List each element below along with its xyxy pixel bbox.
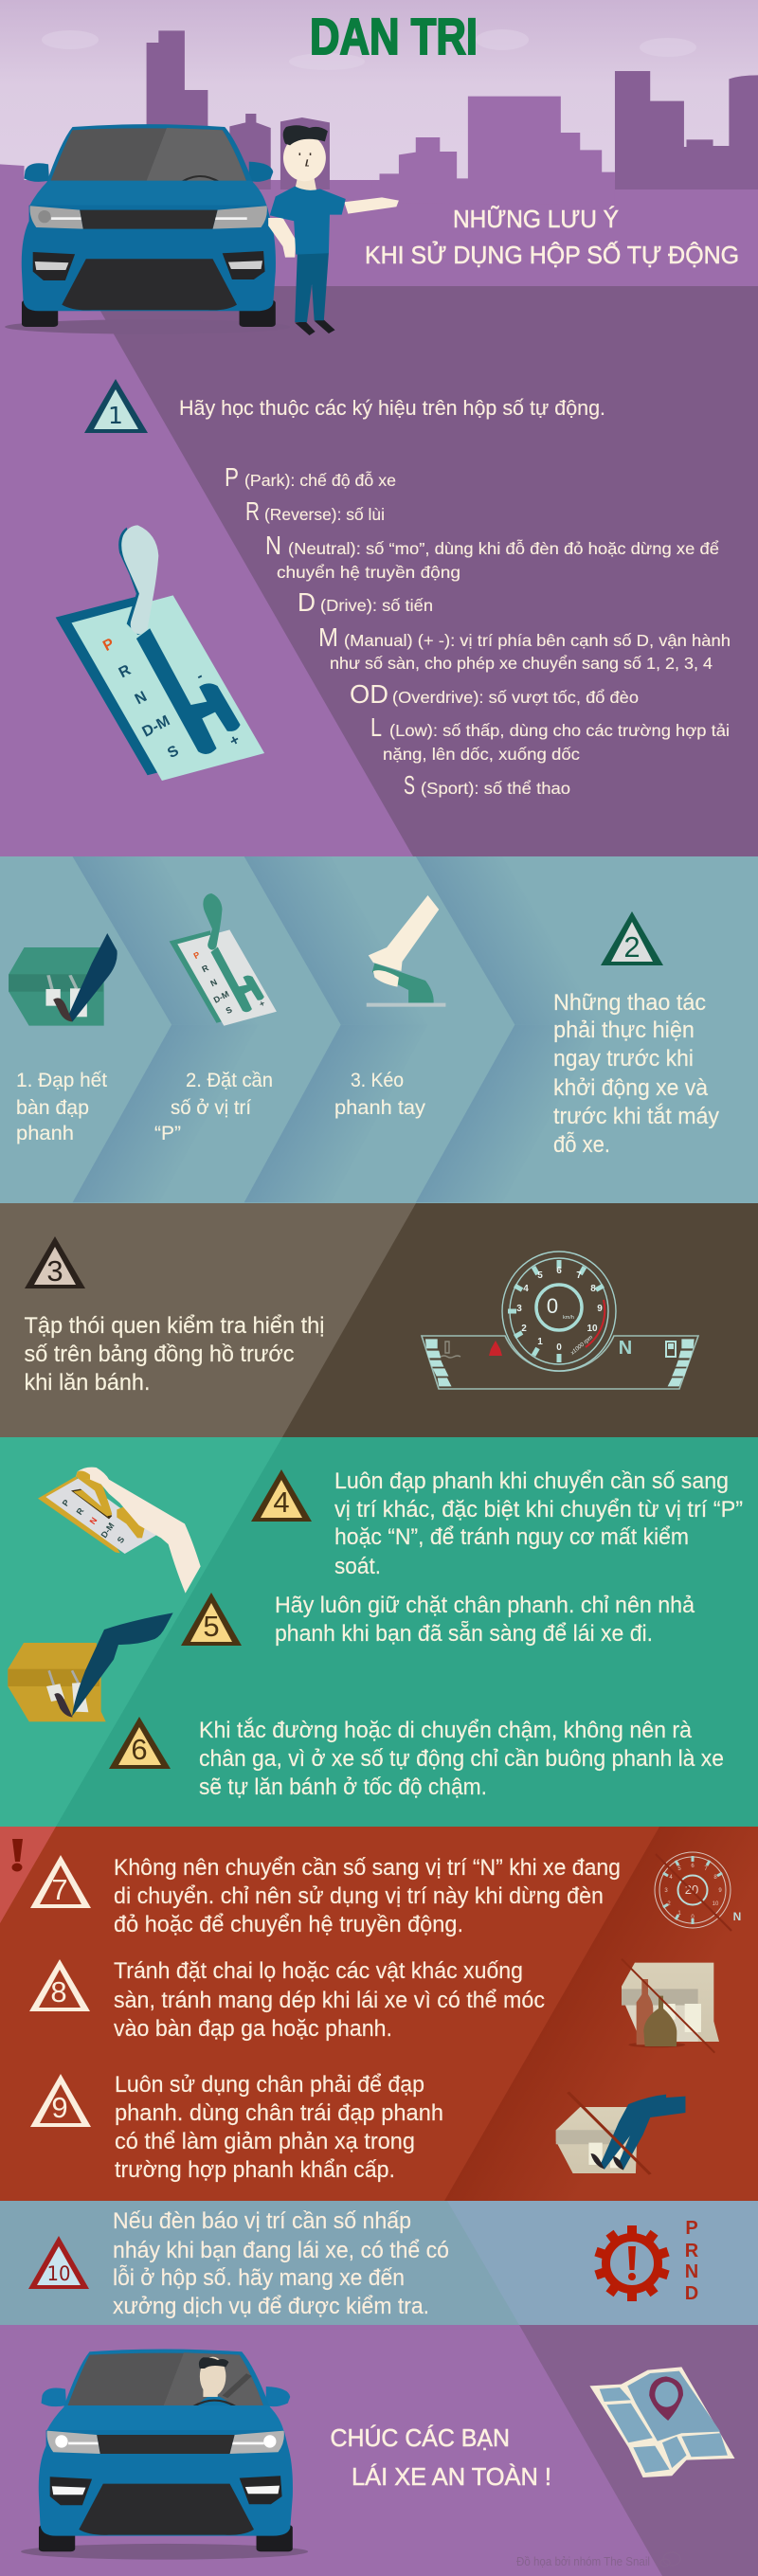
title: KHI SỬ DỤNG HỘP SỐ TỰ ĐỘNG [365,241,739,269]
closing message: CHÚC CÁC BẠN [330,2424,510,2452]
step captions: số ở vị trí [171,1096,251,1119]
illustration: crossed gauge in neutral: 3 [664,1888,668,1894]
illustration: instrument cluster: 2 [521,1324,527,1334]
step captions: 2. Đặt cần [186,1069,273,1091]
illustration: crossed gauge in neutral: N [733,1910,741,1923]
title: NHỮNG LƯU Ý [453,206,619,233]
tip 7: Không nên chuyển cần số sang vị trí “N” khi xe đang [114,1855,621,1881]
gear symbol legend: như số sàn, cho phép xe chuyển sang số 1, 2, 3, 4 [330,654,713,673]
tip 3 text: khi lăn bánh. [25,1370,150,1396]
illustration: instrument cluster: 9 [597,1304,603,1314]
driver [193,2357,249,2409]
illustration: crossed gauge in neutral: 5 [677,1866,681,1872]
gear symbol legend: nặng, lên dốc, xuống dốc [383,745,580,764]
illustration: gear in park: D-M [212,989,230,1005]
illustration: hand on yellow shifter: S [116,1535,126,1545]
tip 7: di chuyển. chỉ nên sử dụng vị trí này khi dừng đèn [114,1883,604,1909]
illustration: gear in park: + [258,999,266,1009]
icon: gearbox warning: D [685,2283,698,2304]
tip 10: 10 [47,2262,70,2285]
step captions: phanh tay [334,1096,425,1119]
icon: gearbox warning [594,2218,699,2304]
step captions: phanh [16,1122,74,1144]
gear symbol legend [225,462,731,800]
gear symbol legend: (Manual) (+ -): vị trí phía bên cạnh số D, vận hành [344,631,731,650]
tip 6: 6 [131,1733,148,1766]
illustration: crossed gauge in neutral [655,1852,741,1931]
gear symbol legend: R [245,496,260,526]
illustration: gear in park: S [225,1005,234,1016]
gear symbol legend: (Sport): số thể thao [421,779,570,798]
illustration: hand on yellow shifter [38,1468,201,1594]
closing message: LÁI XE AN TOÀN ! [352,2463,551,2491]
gear symbol legend: M [318,622,338,652]
tip 3 text: Tập thói quen kiểm tra hiển thị [25,1313,324,1339]
illustration: car with driver [21,2349,308,2560]
tip 10: xưởng dịch vụ để được kiểm tra. [113,2294,429,2319]
tip 10: nháy khi bạn đang lái xe, có thể có [113,2238,449,2263]
logo: DÂN TRÍ [310,8,479,65]
gear symbol legend: L [370,712,382,742]
tip 5: Hãy luôn giữ chặt chân phanh. chỉ nên nhả [275,1593,695,1618]
tip 8: Tránh đặt chai lọ hoặc các vật khác xuống [114,1958,523,1984]
tip 9 [30,2072,443,2183]
closing message [330,2424,551,2491]
step captions [16,1069,425,1144]
tip 10: Nếu đèn báo vị trí cần số nhấp [113,2208,411,2234]
illustration: crossed gauge in neutral: 4 [669,1875,673,1881]
gear symbol legend: P [225,462,239,492]
tip 9: phanh. dùng chân trái đạp phanh [115,2100,443,2126]
panel: tip 3 background [0,1203,758,1437]
illustration: instrument cluster: N [619,1338,632,1359]
tip 9: Luôn sử dụng chân phải để đạp [115,2072,424,2098]
step captions: “P” [154,1122,181,1144]
illustration: crossed gauge in neutral: 2 [667,1901,671,1907]
illustration: instrument cluster: 5 [537,1270,543,1281]
gear symbol legend: (Low): số thấp, dùng cho các trường hợp tải [389,721,730,740]
gear symbol legend: (Overdrive): số vượt tốc, đổ đèo [392,688,639,707]
tip 7 [30,1855,621,1937]
tip 5: 5 [203,1610,220,1643]
tip 8: sàn, tránh mang dép khi lái xe vì có thể móc [114,1988,545,2013]
illustration: instrument cluster: x1000 rpm [569,1335,594,1357]
illustration: car front [5,124,290,334]
icon: gearbox warning: N [685,2261,698,2282]
illustration: instrument cluster: 6 [556,1266,562,1276]
illustration: hand on yellow shifter: N [88,1516,99,1526]
tip 9: 9 [51,2091,68,2124]
illustration: gear in park: P [192,950,202,961]
title [365,206,739,269]
illustration: gear shifter: - [194,668,206,685]
tip 1 badge: 1 [108,402,123,429]
illustration: gear shifter: P [100,636,117,655]
tip 4: hoặc “N”, để tránh nguy cơ mất kiểm [334,1524,689,1550]
tip 2 text: đỗ xe. [553,1132,610,1158]
tip 2 badge [601,911,663,965]
illustration: crossed gauge in neutral: 6 [691,1864,695,1869]
illustration: gear in park [170,893,277,1026]
tip 2 text: ngay trước khi [553,1046,694,1072]
panel: closing background [0,2325,758,2576]
illustration: instrument cluster: 10 [587,1324,598,1334]
illustration: instrument cluster: 0 [547,1294,558,1318]
tip 5 [181,1593,695,1647]
illustration: crossed gauge in neutral: 8 [713,1875,717,1881]
gear symbol legend: (Park): chế độ đỗ xe [244,470,396,490]
tip 2 text: khởi động xe và [553,1075,709,1101]
illustration: hand on yellow shifter: R [75,1505,86,1517]
road shadow [86,286,758,856]
illustration: gear in park: N [208,977,219,988]
tip 7: đỏ hoặc để chuyển hệ truyền động. [114,1912,463,1937]
illustration: gear shifter: N [133,689,150,708]
gear symbol legend: chuyển hệ truyền động [277,563,460,582]
illustration: crossed bottles on floor [622,1959,719,2053]
illustration: man pointing [268,125,399,335]
tip 9: có thể làm giảm phản xạ trong [115,2129,415,2154]
illustration: instrument cluster: 0 [556,1342,562,1353]
tip 4: 4 [273,1486,290,1519]
gear symbol legend: N [265,531,281,560]
tip 4: vị trí khác, đặc biệt khi chuyển từ vị trí “P” [334,1497,743,1522]
tip 2 text: phải thực hiện [553,1018,695,1043]
tip 4: Luôn đạp phanh khi chuyển cần số sang [334,1468,729,1494]
illustration: gear shifter: D-M [140,712,172,741]
tip 3 text: số trên bảng đồng hồ trước [25,1342,294,1367]
icon: gearbox warning: P [685,2218,698,2239]
tip 3 badge: 3 [46,1254,63,1288]
panel: tips 4-6 background [0,1437,758,1827]
panel: tip 10 background [0,2201,758,2325]
tip 2 text: trước khi tắt máy [553,1104,719,1129]
illustration: instrument cluster: 3 [516,1304,522,1314]
illustration: crossed gauge in neutral: 1 [677,1911,681,1917]
illustration: crossed two feet on pedals [556,2092,685,2174]
tip 8 [29,1958,545,2042]
icon: warning exclamation [11,1839,23,1872]
tip 6: Khi tắc đường hoặc di chuyển chậm, không nên rà [199,1718,693,1743]
panel: header and tip 1 background [0,0,758,856]
illustration: hand on yellow shifter: D-M [99,1521,117,1540]
illustration: foot on brake [8,1612,173,1721]
gear symbol legend: (Reverse): số lùi [264,505,385,524]
tip 6: chân ga, vì ở xe số tự động chỉ cần buông phanh là xe [199,1746,724,1772]
illustration: crossed gauge in neutral: 7 [704,1866,708,1872]
tip 4 [251,1468,743,1579]
step captions: 1. Đạp hết [16,1069,107,1091]
illustration: hand on yellow shifter: P [61,1498,71,1508]
gear symbol legend: (Drive): số tiến [320,596,433,615]
tip 3 text [25,1313,324,1396]
illustration: instrument cluster [422,1252,698,1389]
illustration: crossed gauge in neutral: 0 [691,1915,695,1920]
illustration: instrument cluster: 4 [523,1284,529,1294]
tip 6: sẽ tự lăn bánh ở tốc độ chậm. [199,1774,487,1800]
tip 2 text [553,990,719,1158]
tip 6 [109,1717,724,1800]
gear symbol legend: OD [350,679,388,709]
gear symbol legend: D [298,587,316,617]
tip 8: vào bàn đạp ga hoặc phanh. [114,2016,392,2042]
illustration: instrument cluster: 1 [537,1337,543,1347]
illustration: instrument cluster: 7 [576,1270,582,1281]
panel: tip 2 background chevrons [0,856,758,1203]
illustration: gear shifter [56,525,264,781]
tip 7: 7 [51,1873,68,1906]
tip 1 badge [84,379,148,433]
credit: Đồ họa bởi nhóm The Snail [516,2554,650,2568]
tip 10 [28,2208,449,2319]
tip 2 badge: 2 [623,930,641,964]
gear symbol legend: (Neutral): số “mo”, dùng khi đỗ đèn đỏ hoặc dừng xe để [288,538,719,558]
tip 10: lỗi ở hộp số. hãy mang xe đến [113,2265,405,2291]
illustration: pressing brake pedal [9,933,117,1026]
clouds [42,29,696,70]
tip 3 badge [25,1236,85,1288]
gear symbol legend: S [404,770,415,800]
illustration: instrument cluster: 8 [590,1284,596,1294]
icon: gearbox warning: R [685,2241,699,2261]
illustration: gear shifter: S [165,743,182,762]
illustration: gear shifter: R [117,662,134,681]
back skyline [147,30,758,189]
tip 5: phanh khi bạn đã sẵn sàng để lái xe đi. [275,1620,653,1647]
tip 2 text: Những thao tác [553,990,706,1016]
tip 4: soát. [334,1554,381,1579]
tip 8: 8 [50,1975,67,2009]
front skyline [0,97,615,206]
panel: tips 7-9 background [0,1827,758,2201]
illustration: gear in park: R [200,963,210,974]
tip 9: trường hợp phanh khẩn cấp. [115,2157,395,2183]
illustration: map with pin [589,2367,735,2477]
step captions: bàn đạp [16,1096,89,1119]
illustration: gear shifter: + [227,731,243,750]
illustration: crossed gauge in neutral: 9 [718,1888,722,1894]
illustration: instrument cluster: km/h [563,1315,574,1321]
tip 1 heading: Hãy học thuộc các ký hiệu trên hộp số tự động. [179,396,605,420]
step captions: 3. Kéo [351,1069,404,1091]
illustration: pulling hand brake [367,895,445,1007]
illustration: crossed gauge in neutral: 20 [685,1882,698,1897]
illustration: crossed gauge in neutral: 10 [713,1901,719,1907]
